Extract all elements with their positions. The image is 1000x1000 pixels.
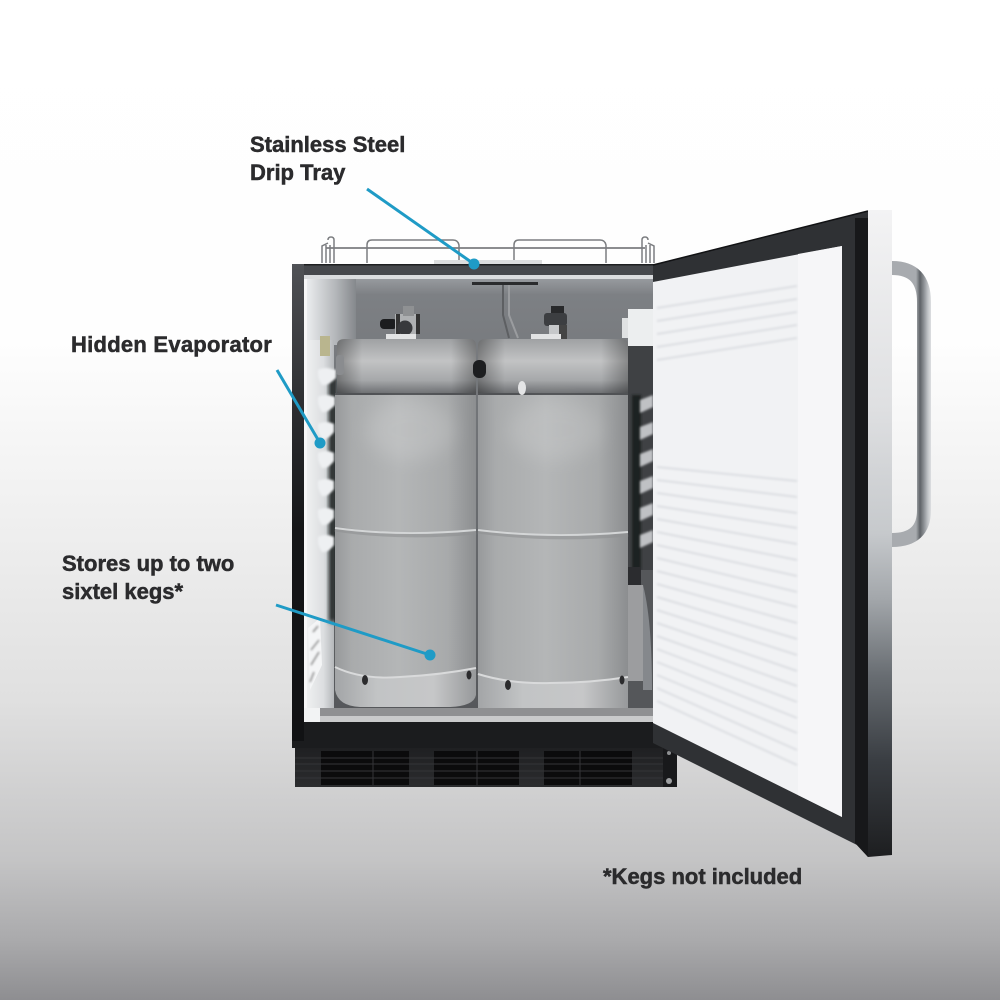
door handle bbox=[892, 268, 924, 540]
cabinet left frame bbox=[292, 264, 304, 748]
label: stores kegs: sixtel kegs* bbox=[62, 579, 184, 604]
callout line: kegs bbox=[276, 605, 436, 660]
rating label bbox=[308, 618, 322, 690]
warning label bbox=[320, 336, 330, 356]
floor tray bbox=[320, 708, 653, 716]
stainless door edge bbox=[868, 210, 892, 857]
right evaporator fins bbox=[628, 345, 653, 570]
drip tray guard rail bbox=[322, 237, 654, 264]
keg left bbox=[335, 339, 476, 707]
interior back wall bbox=[304, 277, 653, 720]
door liner ribs bbox=[657, 286, 797, 765]
thermostat housing bbox=[622, 309, 653, 346]
label: stores kegs: Stores up to two bbox=[62, 551, 234, 576]
beer lines bbox=[472, 282, 538, 338]
refrigerator cabinet bbox=[292, 264, 664, 748]
keg coupler right bbox=[531, 306, 567, 339]
door black gasket column bbox=[855, 218, 868, 857]
grille vents bbox=[321, 751, 632, 785]
keg right bbox=[473, 339, 628, 708]
keg coupler left bbox=[380, 306, 420, 339]
cabinet top band bbox=[292, 264, 654, 277]
base grille bbox=[295, 748, 677, 787]
callout line: drip tray bbox=[367, 189, 480, 270]
hidden evaporator fins left bbox=[318, 368, 336, 622]
door inner liner bbox=[653, 246, 842, 817]
callout line: evaporator bbox=[277, 370, 326, 448]
label: stainless steel drip tray: Drip Tray bbox=[250, 160, 346, 185]
lower cabinet frame bbox=[304, 722, 654, 741]
door frame bbox=[653, 211, 868, 857]
label: hidden evaporator: Hidden Evaporator bbox=[71, 332, 272, 357]
stainless side block bbox=[628, 567, 653, 710]
footnote: *Kegs not included bbox=[603, 864, 802, 889]
left interior wall bbox=[304, 340, 334, 716]
label: stainless steel drip tray: Stainless Steel bbox=[250, 132, 405, 157]
upper side wall shading bbox=[304, 279, 356, 345]
open door bbox=[653, 210, 924, 857]
